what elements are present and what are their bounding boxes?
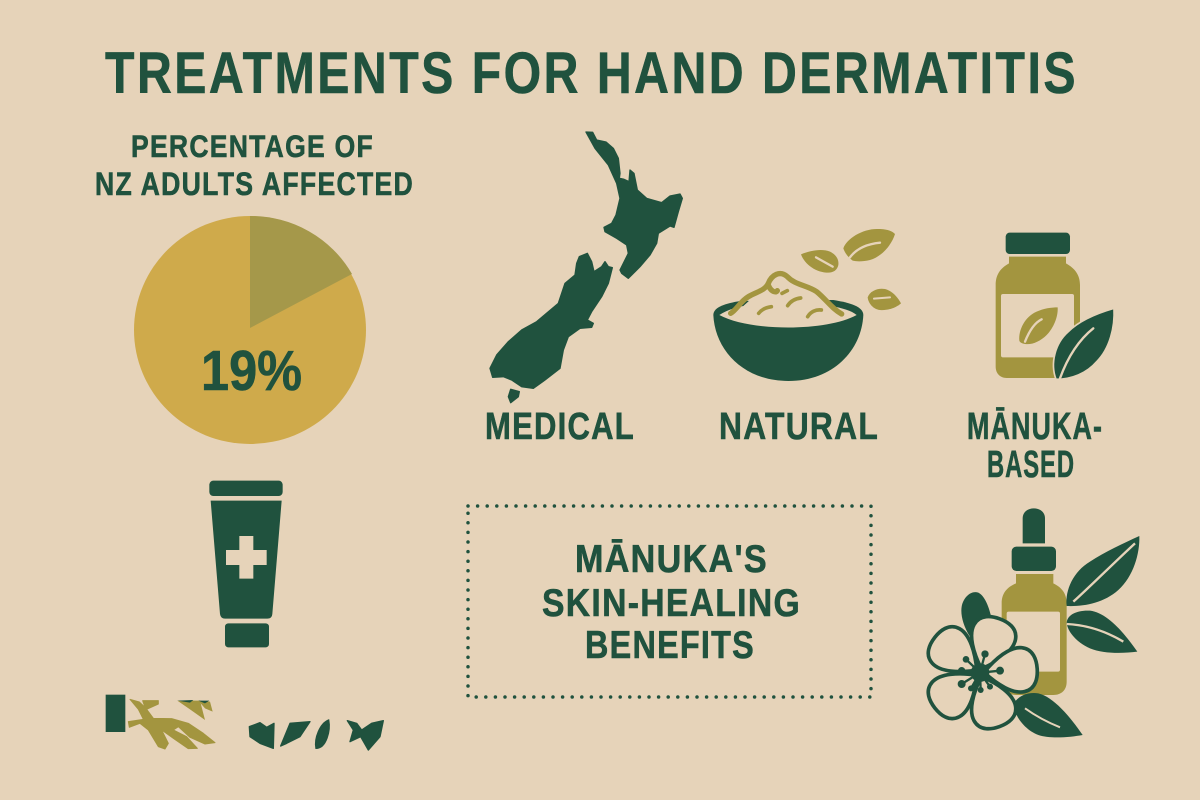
pie chart heading	[95, 128, 414, 202]
label: medical: MEDICAL	[485, 406, 635, 448]
pie chart heading: PERCENTAGE OF	[131, 128, 374, 164]
callout: manuka's skin-healing benefits: MĀNUKA'S	[575, 538, 768, 581]
icon: New Zealand map	[490, 132, 682, 403]
icon: jar with leaf	[996, 233, 1114, 379]
icon: dropper bottle with flower and leaves	[921, 508, 1139, 737]
label: manuka-based: BASED	[987, 444, 1075, 486]
panel: percentage of NZ adults affected	[95, 128, 414, 444]
pie chart	[134, 216, 366, 444]
icon: hand and leaf fragments	[106, 695, 383, 750]
callout: manuka's skin-healing benefits: SKIN-HEALING	[542, 582, 801, 625]
label: manuka-based: MĀNUKA-	[967, 406, 1103, 448]
pie chart heading: NZ ADULTS AFFECTED	[95, 166, 414, 202]
icon: medical tube	[209, 481, 283, 647]
pie chart: 19%	[201, 339, 302, 403]
callout: manuka's skin-healing benefits	[468, 506, 871, 697]
label: manuka-based	[967, 406, 1103, 486]
icon: bowl with leaves	[713, 229, 901, 381]
label: natural: NATURAL	[719, 406, 879, 448]
callout: manuka's skin-healing benefits: BENEFITS	[585, 624, 755, 667]
